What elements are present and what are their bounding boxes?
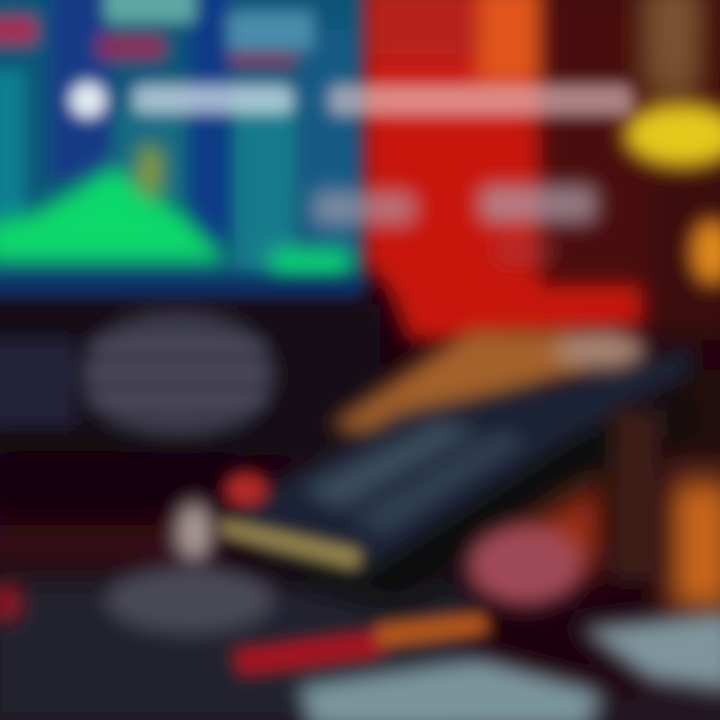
text block: blurred labels — [312, 184, 598, 264]
monitor screen — [0, 0, 362, 290]
calculator tan edge — [220, 518, 362, 570]
panel: red orange pen — [232, 612, 490, 676]
panel: desk — [0, 525, 470, 720]
calculator body — [228, 345, 695, 570]
icon: red dot left — [0, 585, 22, 621]
chart: green mountain — [0, 165, 228, 262]
panel: grey blob on desk — [105, 566, 275, 634]
lamp glow — [690, 218, 720, 286]
panel: monitor — [0, 0, 362, 298]
chart: yellow peak — [136, 142, 164, 198]
panel: dark band below monitor — [0, 450, 250, 560]
heading: blurred title — [69, 81, 633, 119]
red button — [224, 473, 268, 507]
calculator shadow — [230, 390, 690, 610]
panel: calculator — [174, 330, 695, 610]
icon: lamp light — [624, 0, 720, 286]
panel: paper sheets — [298, 612, 720, 720]
calculator orange top — [330, 330, 590, 445]
keyboard lines — [90, 340, 265, 405]
calculator keys — [300, 420, 530, 535]
white corner — [174, 500, 214, 564]
chart: green bar — [270, 248, 350, 284]
panel: keyboard under monitor — [0, 305, 380, 455]
icon: right pillar — [612, 410, 660, 580]
icon: red dice blob — [467, 525, 583, 605]
panel: red column — [360, 0, 645, 340]
lamp arm — [655, 0, 695, 90]
panel: right dark wall — [530, 0, 720, 340]
panel: lower right warm area — [480, 370, 720, 610]
calculator highlight — [554, 330, 646, 370]
monitor bottom edge — [0, 274, 362, 298]
